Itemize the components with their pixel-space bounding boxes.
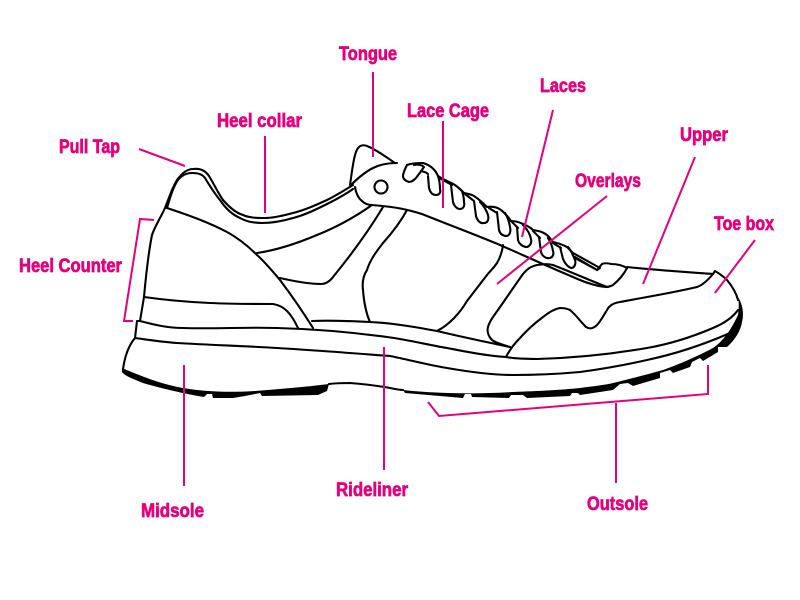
callout: laces: Laces — [540, 76, 586, 97]
callout: heel collar: Heel collar — [217, 111, 303, 132]
callout: outsole — [428, 365, 708, 515]
callout: heel counter: Heel Counter — [19, 256, 123, 277]
midfoot band line — [437, 245, 503, 331]
callout: tongue — [339, 44, 397, 157]
callout: pull tap — [59, 137, 185, 166]
tongue — [350, 145, 395, 185]
heel outsole — [122, 368, 329, 398]
callout: upper: Upper — [680, 125, 729, 146]
callout: outsole: Outsole — [587, 494, 648, 515]
laces — [403, 163, 600, 270]
callout: laces — [522, 76, 586, 237]
callout: midsole: Midsole — [141, 501, 204, 522]
quarter panel lines — [257, 205, 383, 284]
callout: lace cage — [407, 101, 489, 208]
heel collar inner line — [167, 173, 353, 223]
forefoot overlay — [488, 264, 607, 347]
callout: lace cage: Lace Cage — [407, 101, 489, 122]
toe overlay and eyestay — [506, 274, 713, 357]
heel counter lower panel — [144, 297, 298, 328]
saddle panel — [312, 210, 510, 347]
callout: overlays: Overlays — [575, 171, 641, 192]
rideliner top edge — [140, 310, 738, 359]
rideliner lower edge — [135, 333, 730, 375]
forefoot outsole — [403, 297, 743, 398]
callout: heel collar — [217, 111, 303, 213]
callout: heel counter — [19, 219, 154, 321]
lace cage — [351, 163, 627, 287]
callout: toe box — [714, 214, 774, 293]
callout: tongue: Tongue — [339, 44, 397, 65]
heel counter — [167, 208, 313, 328]
callout: pull tap: Pull Tap — [59, 137, 120, 158]
eyelet — [374, 180, 388, 194]
shoe line drawing — [122, 145, 743, 398]
heel and collar outline — [123, 169, 353, 369]
midsole bottom edge — [329, 383, 403, 390]
callout: rideliner: Rideliner — [336, 480, 409, 501]
callout: overlays — [497, 171, 641, 284]
callout: toe box: Toe box — [714, 214, 774, 235]
callout: upper — [643, 125, 729, 284]
toe and upper outline — [627, 267, 738, 300]
